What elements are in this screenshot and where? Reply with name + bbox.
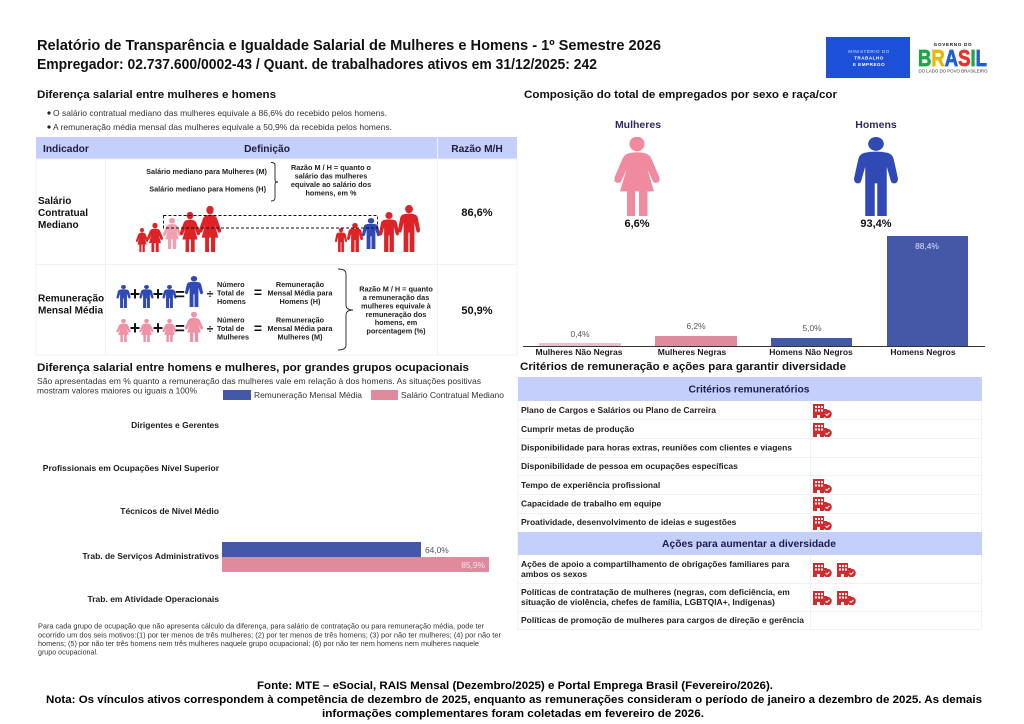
icon group: women ordered by salary xyxy=(136,206,221,252)
row label: salário contratual mediano: Mediano xyxy=(38,220,79,231)
definition: razão remuneração brace text: Razão M / H = quanto xyxy=(359,284,433,294)
table header xyxy=(43,144,503,155)
pictogram: mulheres: Mulheres xyxy=(615,119,661,131)
footnote text: homens; (5) por não ter três homens nem três mulheres naquele grupo ocupacional; (6) por não ter nem homens nem mulheres naquele xyxy=(38,639,479,648)
formula: men average: Remuneração xyxy=(276,280,325,289)
icon group: men ordered by salary xyxy=(335,205,420,252)
bar chart: composição por sexo e raça: 6,2% xyxy=(686,321,706,331)
formula: women average: ÷ xyxy=(207,322,214,336)
footer: source and note: Nota: Os vínculos ativos correspondem à competência de dezembro de 2025, enquanto as remunerações consideram o período de janeiro a dezembro de 2025. As demais xyxy=(46,694,982,706)
heading: composição: Composição do total de empregados por sexo e raça/cor xyxy=(524,89,838,101)
formula: women average: + xyxy=(130,318,140,338)
footnote text xyxy=(38,622,502,656)
heading: critérios de remuneração: Critérios de remuneração e ações para garantir diversidade xyxy=(520,361,846,373)
pictogram: mulheres xyxy=(614,119,661,230)
table header: Definição xyxy=(244,144,290,155)
footer: source and note: Fonte: MTE – eSocial, RAIS Mensal (Dezembro/2025) e Portal Emprega Brasil (Fevereiro/2026). xyxy=(257,680,773,692)
value: 86,6%: 86,6% xyxy=(461,207,493,219)
logo: governo do brasil: DO LADO DO POVO BRASILEIRO xyxy=(918,68,988,74)
table header: Razão M/H xyxy=(451,144,503,155)
logo: governo do brasil: GOVERNO DO xyxy=(934,42,972,47)
title: Empregador: 02.737.600/0002-43 / Quant. de trabalhadores ativos em 31/12/2025: 242 xyxy=(37,57,597,73)
formula: women average xyxy=(116,312,333,342)
action rows xyxy=(521,559,804,625)
description text xyxy=(37,376,481,396)
row label: salário contratual mediano: Salário xyxy=(38,196,71,207)
definition: salário mediano text: Salário mediano para Homens (H) xyxy=(149,184,267,194)
logo: ministério do trabalho e emprego xyxy=(826,37,910,78)
band: ações para aumentar a diversidade xyxy=(518,532,982,555)
formula: men average: Total de xyxy=(217,288,244,298)
bar chart: composição por sexo e raça: Mulheres Negras xyxy=(658,347,727,357)
pictogram: homens: 93,4% xyxy=(860,218,892,230)
panel: criteria table xyxy=(518,377,982,630)
formula: women average: Mulheres xyxy=(217,332,249,342)
bullet text block: O salário contratual mediano das mulheres equivale a 86,6% do recebido pelos homens. xyxy=(53,108,387,118)
bar chart: composição por sexo e raça: Mulheres Não Negras xyxy=(536,347,623,357)
definition: salário mediano text: equivale ao salário dos xyxy=(291,180,371,189)
description text: mostram valores maiores ou iguais a 100% xyxy=(37,386,198,396)
footnote text: Para cada grupo de ocupação que não apresenta cálculo da diferença, para salário de contratação ou para remuneração média, pode ter xyxy=(38,622,485,630)
criteria rows: Plano de Cargos e Salários ou Plano de Carreira xyxy=(521,405,716,415)
footer: source and note xyxy=(46,680,982,720)
formula: men average: = xyxy=(254,284,262,300)
row label: salário contratual mediano xyxy=(38,196,88,231)
formula: women average: Mulheres (M) xyxy=(278,332,323,342)
row label: remuneração mensal média: Remuneração xyxy=(38,294,104,304)
bullet text block: A remuneração média mensal das mulheres equivale a 50,9% da recebida pelos homens. xyxy=(53,122,392,132)
criteria rows: Proatividade, desenvolvimento de ideias e sugestões xyxy=(521,517,737,527)
heading: diferença salarial entre mulheres e homens: Diferença salarial entre mulheres e homens xyxy=(37,89,276,101)
action rows: Políticas de contratação de mulheres (negras, com deficiência, em xyxy=(521,587,790,597)
formula: men average xyxy=(116,276,333,308)
formula: women average: Número xyxy=(217,316,245,324)
formula: men average: + xyxy=(153,284,163,304)
pictogram: mulheres: 6,6% xyxy=(624,218,650,230)
formula: women average: = xyxy=(254,320,262,336)
bar chart: composição por sexo e raça xyxy=(523,236,985,357)
definition: razão remuneração brace text: a remuneração das xyxy=(363,293,429,302)
action rows: situação de violência, chefes de família, LGBTQIA+, Indígenas) xyxy=(521,597,775,607)
formula: men average: Número xyxy=(217,280,245,289)
legend xyxy=(223,390,504,400)
criteria rows: Disponibilidade para horas extras, reuniões com clientes e viagens xyxy=(521,442,792,452)
band: ações para aumentar a diversidade: Ações para aumentar a diversidade xyxy=(662,538,836,550)
definition: razão remuneração brace text: mulheres equivale à xyxy=(361,302,432,310)
formula: women average: + xyxy=(153,318,163,338)
definition: razão remuneração brace text: porcentagem (%) xyxy=(366,326,426,336)
bar chart: grupos ocupacionais: Trab. de Serviços Administrativos xyxy=(82,551,219,561)
logo: ministério do trabalho e emprego: MINISTÉRIO DO xyxy=(848,48,890,54)
legend: Salário Contratual Mediano xyxy=(401,390,504,400)
definition: salário mediano text: salário das mulheres xyxy=(295,172,367,180)
criteria rows: Tempo de experiência profissional xyxy=(521,480,660,490)
logo: governo do brasil: BRASIL xyxy=(918,45,987,71)
bar chart: grupos ocupacionais: 85,9% xyxy=(461,560,486,570)
criteria rows: Capacidade de trabalho em equipe xyxy=(521,498,662,508)
formula: women average: Remuneração xyxy=(276,316,325,324)
action rows: Ações de apoio a compartilhamento de obrigações familiares para xyxy=(521,559,790,569)
row label: remuneração mensal média xyxy=(38,294,104,316)
formula: men average: Homens xyxy=(217,297,246,306)
logo: ministério do trabalho e emprego: E EMPREGO xyxy=(853,62,885,67)
legend: Remuneração Mensal Média xyxy=(254,390,362,400)
pictogram: homens xyxy=(854,119,898,230)
bar chart: grupos ocupacionais xyxy=(43,420,489,604)
table header: Indicador xyxy=(43,144,89,155)
definition: razão remuneração brace text: remuneração dos xyxy=(366,310,426,319)
band: critérios remuneratórios: Critérios remuneratórios xyxy=(688,384,810,396)
value: 50,9%: 50,9% xyxy=(461,305,493,317)
definition: razão remuneração brace text: homens, em xyxy=(375,318,418,327)
bullet text block xyxy=(47,108,392,132)
formula: women average: Mensal Média para xyxy=(268,324,333,333)
criteria icons xyxy=(813,404,832,530)
definition: razão remuneração brace text xyxy=(338,269,433,350)
bar chart: grupos ocupacionais: 64,0% xyxy=(425,545,449,555)
bar chart: grupos ocupacionais: Técnicos de Nível Médio xyxy=(120,506,219,516)
panel: indicator table xyxy=(36,137,517,355)
definition: salário mediano text: Salário mediano para Mulheres (M) xyxy=(146,167,268,176)
definition: salário mediano text: homens, em % xyxy=(305,188,357,198)
criteria rows: Cumprir metas de produção xyxy=(521,424,634,434)
bar chart: composição por sexo e raça: 5,0% xyxy=(802,323,822,333)
heading: diferença por grupos ocupacionais: Diferença salarial entre homens e mulheres, por grandes grupos ocupacionais xyxy=(37,362,469,374)
description text: São apresentadas em % quanto a remuneração das mulheres vale em relação à dos homens. As situações positivas xyxy=(37,376,481,386)
formula: men average: = xyxy=(175,285,185,304)
logo: ministério do trabalho e emprego: TRABALHO xyxy=(854,56,884,60)
bar chart: grupos ocupacionais: Trab. em Atividade Operacionais xyxy=(88,594,219,604)
bar chart: composição por sexo e raça: 0,4% xyxy=(570,329,590,339)
bar chart: composição por sexo e raça: 88,4% xyxy=(915,241,939,251)
title: Relatório de Transparência e Igualdade Salarial de Mulheres e Homens - 1º Semestre 2026 xyxy=(37,38,661,54)
formula: women average: = xyxy=(175,319,185,338)
footnote text: grupo ocupacional. xyxy=(38,648,98,656)
bar chart: grupos ocupacionais: Dirigentes e Gerentes xyxy=(131,420,219,430)
criteria rows xyxy=(521,405,792,527)
row label: salário contratual mediano: Contratual xyxy=(38,208,88,219)
band: critérios remuneratórios xyxy=(518,377,982,401)
bar chart: grupos ocupacionais: Profissionais em Ocupações Nível Superior xyxy=(43,463,220,473)
definition: salário mediano text xyxy=(146,162,372,201)
criteria rows: Disponibilidade de pessoa em ocupações específicas xyxy=(521,461,738,471)
formula: men average: + xyxy=(130,284,140,304)
formula: women average: Total de xyxy=(217,324,244,333)
pictogram: homens: Homens xyxy=(855,119,897,131)
formula: men average: Homens (H) xyxy=(280,297,321,306)
formula: men average: Mensal Média para xyxy=(268,288,333,298)
formula: men average: ÷ xyxy=(207,287,214,301)
row label: remuneração mensal média: Mensal Média xyxy=(38,306,103,316)
bar chart: composição por sexo e raça: Homens Negros xyxy=(890,347,956,357)
footnote text: ocorrido um dos seis motivos:(1) por ter menos de três mulheres; (2) por ter menos de três homens; (3) por não ter mulheres; (4) por não ter xyxy=(38,630,502,640)
action rows: Políticas de promoção de mulheres para cargos de direção e gerência xyxy=(521,615,804,625)
action icons xyxy=(813,563,856,605)
bar chart: composição por sexo e raça: Homens Não Negros xyxy=(769,347,853,357)
footer: source and note: informações complementares foram coletadas em fevereiro de 2026. xyxy=(322,708,704,720)
definition: salário mediano text: Razão M / H = quanto o xyxy=(291,163,372,172)
title xyxy=(37,38,661,73)
action rows: ambos os sexos xyxy=(521,569,587,579)
